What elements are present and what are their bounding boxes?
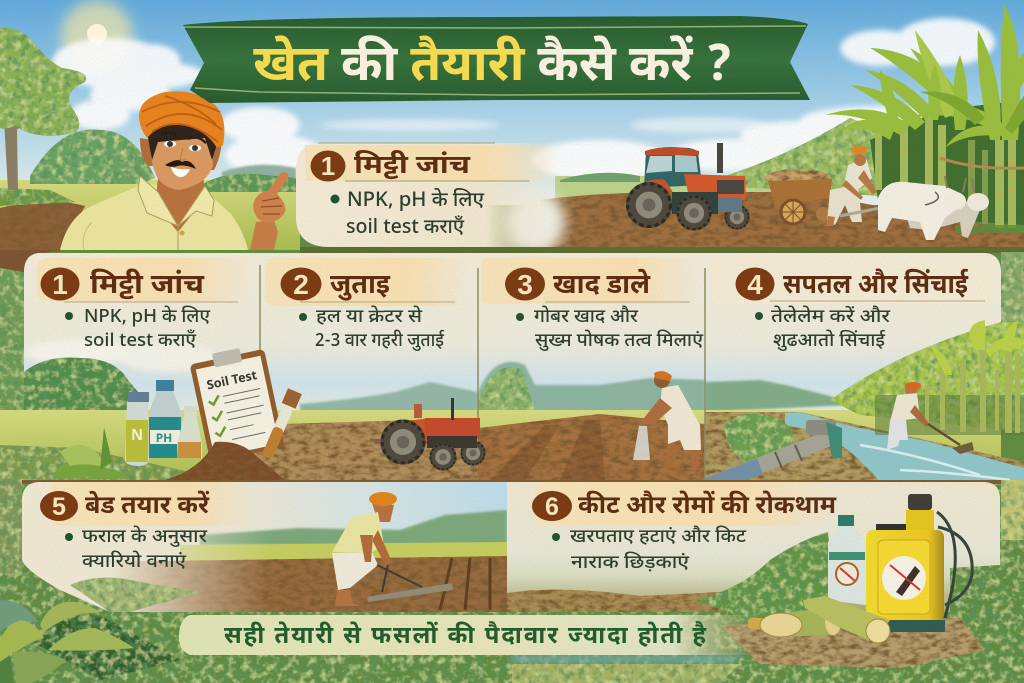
number badge: [505, 268, 545, 300]
number badge: [40, 491, 78, 521]
number badge: 2: [293, 269, 309, 300]
footer text: सही तेयारी से फसलों की पैदावार ज्यादा होती है: [224, 621, 706, 653]
panel 2: ploughing: [265, 258, 470, 354]
heading: जुताइ: [330, 270, 391, 305]
bullet text: [755, 305, 891, 354]
PH bottle: PH: [156, 431, 172, 447]
illustration: weeds bush: [695, 532, 835, 618]
heading: खाद डाले: [553, 268, 651, 305]
bullet text: [299, 305, 445, 354]
callout panel: soil testing: [296, 143, 560, 247]
test tube: [260, 388, 302, 459]
bullet text: शुढआतो सिंचाई: [773, 329, 886, 354]
number badge: 3: [517, 269, 533, 300]
pipe: [705, 420, 842, 487]
illustration: sugarcane row: [830, 320, 1024, 435]
bullet text: गोबर खाद और: [534, 306, 638, 330]
number badge: 1: [52, 269, 68, 300]
sun glow: [61, 0, 133, 72]
bullet text: खरपताए हटाएं और किट: [570, 526, 747, 550]
bullet text: सुख्म पोषक तत्व मिलाएं: [535, 330, 704, 354]
bullet text: [65, 525, 207, 575]
number badge: [40, 268, 80, 300]
bullet text: 2-3 वार गहरी जुताई: [315, 329, 445, 354]
farmer mascot: [60, 91, 288, 250]
distant cane line: [725, 118, 905, 196]
right ground: [300, 173, 1024, 254]
illustration: farmer with harrow: [332, 492, 453, 606]
bullet text: क्यारियो वनाएं: [82, 551, 187, 575]
N bottle: N: [131, 428, 143, 447]
soil pile: [165, 442, 285, 480]
illustration: irrigation channel: [705, 412, 1024, 487]
bullet text: फराल के अनुसार: [82, 525, 207, 550]
bullet text: soil test कराएँ: [84, 330, 197, 354]
bottom foliage background: [0, 480, 1024, 683]
number badge 1: [310, 150, 346, 182]
N bottle: [125, 392, 149, 466]
title text: खेत की तैयारी कैसे करें ?: [253, 35, 733, 101]
panel 3: manure: [481, 258, 704, 354]
sugarcane plants: [825, 4, 1024, 233]
bullet text: [516, 306, 704, 354]
heading: बेड तयार करें: [85, 490, 210, 524]
bullet text: [65, 305, 211, 354]
illustration: yellow sprayer: [866, 494, 972, 632]
oxen: [878, 176, 989, 240]
ploughman: [826, 145, 880, 226]
scene: forest and field: [0, 340, 1024, 482]
illustration: small tractor: [375, 398, 486, 470]
illustration: cut sugarcane: [748, 596, 890, 643]
left hills and field: [0, 130, 300, 252]
steps panel: row one: [0, 253, 1024, 482]
clipboard label: Soil Test: [206, 369, 259, 395]
bullet text: तेलेलेम करें और: [771, 305, 891, 330]
flask: [177, 406, 202, 458]
bullet text: हल या क्रेटर से: [316, 305, 423, 330]
bullet text: NPK, pH के लिए: [84, 305, 211, 330]
callout text: soil test कराएँ: [346, 214, 465, 242]
big leaves: [0, 600, 134, 683]
illustration: soil test kit: [52, 343, 302, 480]
number badge: [280, 268, 322, 300]
heading: मिट्टी जांच: [90, 269, 205, 305]
clipboard: [188, 343, 285, 462]
heading: कीट और रोमों की रोकथाम: [578, 490, 837, 524]
left edge foliage: [0, 250, 1024, 418]
illustration: worker spreading manure: [490, 371, 701, 480]
clouds: [52, 18, 995, 180]
number badge: 5: [52, 493, 66, 521]
panel 4: levelling and irrigation: [712, 258, 996, 354]
number badge: [532, 491, 572, 521]
plant: [52, 427, 128, 480]
large tractor: [626, 143, 750, 230]
illustration: pesticide bottle: [828, 515, 866, 605]
bullet text: नाराक छिड़काएं: [571, 552, 690, 576]
callout heading: मिट्टी जांच: [354, 150, 471, 184]
panel 5: bed preparation: [22, 482, 507, 612]
number badge: 4: [747, 269, 763, 300]
number badge: 6: [545, 493, 559, 521]
panel 6: pest control: [507, 482, 1000, 612]
heading: सपतल और सिंचाई: [783, 268, 969, 305]
panel 1: soil test: [37, 258, 251, 354]
divider lines: [260, 265, 705, 480]
illustration: worker with hoe: [887, 382, 974, 454]
footer banner: [179, 615, 760, 655]
number badge 1: 1: [321, 151, 335, 181]
callout text: NPK, pH के लिए: [347, 187, 485, 215]
PH bottle: [149, 380, 181, 458]
number badge: [736, 268, 774, 300]
title banner: [183, 16, 810, 103]
callout text: [330, 187, 485, 242]
bullet text: [552, 526, 747, 576]
ox cart: [765, 169, 832, 224]
scene: prepared beds: [90, 510, 507, 612]
left tree: [0, 28, 86, 190]
